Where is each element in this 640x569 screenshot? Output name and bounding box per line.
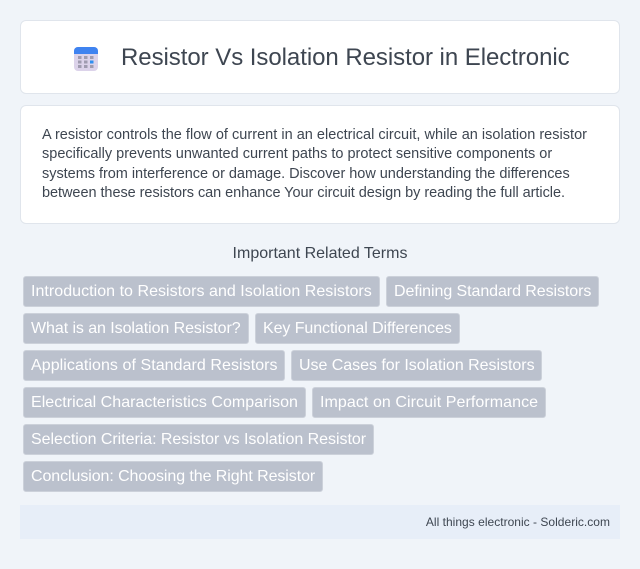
- related terms tags: Use Cases for Isolation Resistors: [299, 357, 535, 374]
- related terms tags: Impact on Circuit Performance: [320, 394, 538, 411]
- related terms tags: [23, 276, 599, 492]
- icon: calendar grid: [74, 47, 98, 71]
- related terms tags: Selection Criteria: Resistor vs Isolation Resistor: [31, 431, 366, 448]
- intro paragraph: between these resistors can enhance Your circuit design by reading the full article.: [42, 185, 565, 201]
- intro paragraph: [42, 127, 587, 201]
- related terms tags: Defining Standard Resistors: [394, 283, 591, 300]
- intro paragraph: specifically prevents unwanted current paths to protect sensitive components or: [42, 146, 552, 162]
- related terms tags: Applications of Standard Resistors: [31, 357, 278, 374]
- related terms tags: Conclusion: Choosing the Right Resistor: [31, 468, 315, 485]
- footer bar: [20, 505, 620, 539]
- intro paragraph: systems from interference or damage. Discover how understanding the differences: [42, 166, 570, 182]
- related terms heading: Important Related Terms: [233, 245, 407, 262]
- related terms tags: Key Functional Differences: [263, 320, 452, 337]
- related terms tags: Electrical Characteristics Comparison: [31, 394, 298, 411]
- intro text card: [20, 105, 620, 224]
- footer credit: All things electronic - Solderic.com: [426, 515, 610, 529]
- related terms tags: What is an Isolation Resistor?: [31, 320, 241, 337]
- intro paragraph: A resistor controls the flow of current in an electrical circuit, while an isolation resistor: [42, 127, 587, 143]
- related terms tags: Introduction to Resistors and Isolation Resistors: [31, 283, 372, 300]
- title: Resistor Vs Isolation Resistor in Electronic: [121, 44, 570, 71]
- header card: [20, 20, 620, 94]
